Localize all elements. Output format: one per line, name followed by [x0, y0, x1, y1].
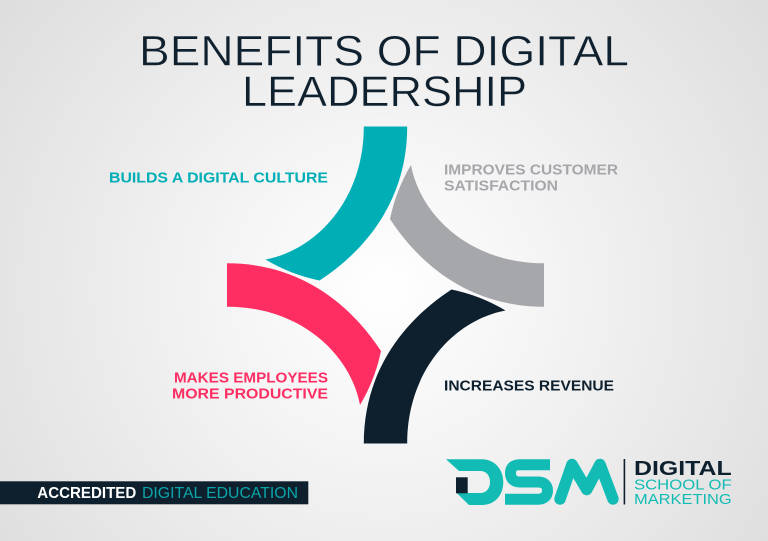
logo wordmark: SCHOOL OF [634, 478, 732, 494]
label: makes employees more productive: MORE PRODUCTIVE [172, 387, 328, 403]
arc: grey customer satisfaction [390, 165, 544, 307]
label: builds a digital culture: BUILDS A DIGITAL CULTURE [109, 171, 328, 187]
arc: teal digital culture [266, 126, 407, 280]
label: makes employees more productive: MAKES EMPLOYEES [174, 371, 328, 387]
title: BENEFITS OF DIGITAL [139, 28, 629, 76]
banner: accredited digital education: ACCREDITED [37, 485, 136, 502]
arc: pink employees [227, 263, 381, 405]
label: improves customer satisfaction: SATISFACTION [444, 179, 558, 195]
logo wordmark: MARKETING [634, 492, 732, 508]
title: LEADERSHIP [242, 68, 527, 116]
logo: digital school of marketing [446, 457, 732, 508]
banner: accredited digital education: DIGITAL EDUCATION [142, 485, 298, 502]
diagram: four curved arcs [227, 126, 544, 444]
label: improves customer satisfaction: IMPROVES CUSTOMER [444, 162, 619, 178]
logo divider [624, 459, 625, 504]
label: improves customer satisfaction [444, 162, 619, 195]
logo wordmark: DIGITAL [634, 457, 732, 480]
banner: accredited digital education [0, 481, 308, 504]
label: makes employees more productive [172, 371, 328, 403]
title [139, 28, 629, 116]
label: increases revenue: INCREASES REVENUE [444, 379, 614, 395]
logo wordmark [634, 457, 732, 508]
logo mark: DSM [446, 459, 613, 505]
arc: navy revenue [364, 290, 506, 444]
